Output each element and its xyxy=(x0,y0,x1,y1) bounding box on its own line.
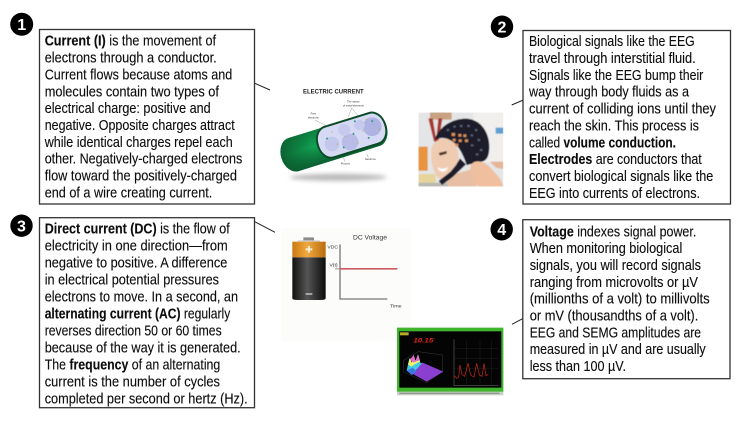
wire title: ELECTRIC CURRENT xyxy=(303,90,364,96)
connector line 3 xyxy=(255,222,275,232)
body text 2: convert biological signals like the xyxy=(529,169,713,185)
green wire body xyxy=(276,108,392,175)
panel 3: direct current xyxy=(10,214,275,408)
body text 4: less than 100 µV. xyxy=(530,359,626,375)
panel 4: voltage xyxy=(490,218,730,379)
body text 4: (millionths of a volt) to millivolts xyxy=(530,292,710,308)
body text 1: Current flows because atoms and xyxy=(45,67,232,83)
body text 1: Current (I) is the movement of xyxy=(45,34,217,50)
body text 3: negative to positive. A difference xyxy=(45,255,227,271)
badge 2: 2 xyxy=(498,19,507,36)
badge 1 xyxy=(10,13,33,36)
body text 3: reverses direction 50 or 60 times xyxy=(45,323,222,339)
body text 2: current of colliding ions until they xyxy=(529,102,717,118)
photo: person wearing EEG cap xyxy=(418,112,503,187)
text box 4 xyxy=(523,220,730,379)
body text 1: negative. Opposite charges attract xyxy=(45,118,235,134)
body text 4: EEG and SEMG amplitudes are xyxy=(530,325,701,341)
body text 2: Electrodes are conductors that xyxy=(529,152,702,168)
body text 3: electrons to move. In a second, an xyxy=(45,289,238,305)
voltage plot: VDC xyxy=(327,244,338,250)
badge 3: 3 xyxy=(17,218,26,235)
body text 2: EEG into currents of electrons. xyxy=(529,186,700,202)
body text 3: electricity in one direction—from xyxy=(45,238,228,254)
icon: battery xyxy=(292,237,326,300)
body text 3: because of the way it is generated. xyxy=(45,340,241,356)
body text 4: measured in µV and are usually xyxy=(530,342,706,358)
body text 4: signals, you will record signals xyxy=(530,258,701,274)
body text 4: Voltage indexes signal power. xyxy=(530,224,696,240)
badge 4 xyxy=(490,218,513,240)
body text 3: Direct current (DC) is the flow of xyxy=(45,221,231,237)
body text 2: travel through interstitial fluid. xyxy=(529,51,696,67)
body text 1: end of a wire creating current. xyxy=(45,185,212,201)
text box 1 xyxy=(40,30,254,204)
voltage plot: DC Voltage xyxy=(353,234,388,241)
wire callouts: Neutrons xyxy=(365,157,376,161)
wire drop shadow xyxy=(290,174,387,181)
body text 1: electrical charge: positive and xyxy=(45,101,211,117)
badge 1: 1 xyxy=(17,17,26,34)
panel 1: current xyxy=(10,13,270,204)
software window xyxy=(397,328,503,395)
panel 2: biological signals xyxy=(491,16,730,204)
body text 1 xyxy=(44,34,242,201)
connector line 2 xyxy=(512,100,523,105)
body text 3 xyxy=(45,221,248,407)
badge 4: 4 xyxy=(497,222,506,239)
body text 4: When monitoring biological xyxy=(530,241,682,257)
3D spectrum plot xyxy=(403,352,443,383)
body text 1: flow toward the positively-charged xyxy=(45,168,237,184)
body text 2: reach the skin. This process is xyxy=(529,118,699,134)
body text 2: Biological signals like the EEG xyxy=(529,34,695,50)
chart: DC voltage with battery xyxy=(281,228,410,341)
body text 4: or mV (thousandths of a volt). xyxy=(530,308,698,324)
badge 3 xyxy=(10,214,33,237)
wire callouts: of metal elements xyxy=(343,103,364,107)
wire callouts: Protons xyxy=(341,162,351,166)
body text 2 xyxy=(528,34,717,202)
body text 4 xyxy=(530,224,710,375)
connector line 4 xyxy=(512,318,523,324)
body text 3: The frequency of an alternating xyxy=(45,357,220,373)
body text 1: molecules contain two types of xyxy=(45,84,220,100)
wire callouts: electrons xyxy=(308,115,319,119)
connector line 1 xyxy=(254,83,270,90)
body text 3: alternating current (AC) regularly xyxy=(45,306,231,322)
voltage plot: Time xyxy=(390,303,402,309)
body text 1: other. Negatively-charged electrons xyxy=(45,152,242,168)
chart background xyxy=(281,228,410,341)
body text 3: completed per second or hertz (Hz). xyxy=(45,391,248,407)
badge 2 xyxy=(491,16,513,38)
body text 2: way through body fluids as a xyxy=(528,85,689,101)
wire callouts xyxy=(308,100,376,166)
text box 2 xyxy=(523,30,730,204)
wire callouts: Free xyxy=(311,112,317,116)
body text 2: Signals like the EEG bump their xyxy=(529,68,703,84)
body text 3: in electrical potential pressures xyxy=(45,272,219,288)
illustration: electric current wire xyxy=(276,90,392,181)
signal trace plot xyxy=(454,339,498,386)
body text 1: electrons through a conductor. xyxy=(45,51,217,67)
body text 3: current is the number of cycles xyxy=(45,374,220,390)
digital readout: 10.15 xyxy=(413,338,434,345)
body text 4: ranging from microvolts or µV xyxy=(530,275,698,291)
body text 2: called volume conduction. xyxy=(529,135,676,151)
screenshot: signal monitoring software xyxy=(397,328,503,395)
voltage plot: V(t) xyxy=(329,263,338,269)
voltage plot xyxy=(327,234,402,309)
body text 1: while identical charges repel each xyxy=(44,135,233,151)
wire callouts: The atoms xyxy=(347,100,360,104)
text box 3 xyxy=(40,218,254,408)
